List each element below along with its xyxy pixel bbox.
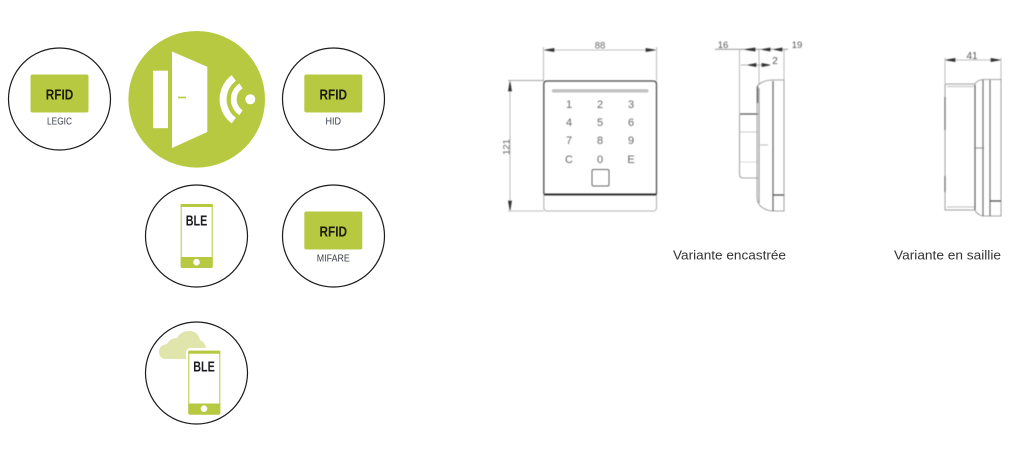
- icon: RFID HID badge: RFID: [320, 86, 347, 103]
- keypad: 6: [628, 117, 634, 129]
- technical drawing: flush-mounted side view: [715, 40, 802, 211]
- icon: BLE smartphone: [146, 185, 248, 287]
- keypad: 7: [566, 135, 572, 147]
- icon: RFID MIFARE badge: RFID: [320, 223, 347, 240]
- front housing: [757, 80, 784, 211]
- dimension: depth 41: [945, 51, 1001, 83]
- caption: surface-mounted variant: Variante en saillie: [894, 248, 1001, 262]
- keypad: E: [627, 154, 635, 166]
- icon: RFID HID badge: [282, 48, 384, 150]
- rear housing: [945, 84, 975, 210]
- keypad: C: [565, 154, 573, 166]
- keypad: 0: [597, 154, 603, 166]
- fingerprint sensor: [592, 170, 609, 186]
- icon: RFID MIFARE badge: [282, 185, 384, 287]
- technical drawing: surface-mounted side view: [945, 51, 1001, 216]
- dimension: width 88: 88: [595, 40, 605, 52]
- dimensions: 16, 19 and 2: 16: [718, 40, 728, 51]
- keypad: 8: [597, 135, 603, 147]
- reader body: [544, 81, 656, 211]
- rear housing: [740, 114, 758, 178]
- icon: RFID LEGIC badge: [8, 48, 110, 150]
- keypad: 9: [628, 135, 634, 147]
- dimension: width 88: [544, 40, 656, 81]
- dimensions: 16, 19 and 2: 19: [792, 40, 802, 51]
- dimensions: 16, 19 and 2: [715, 40, 802, 114]
- icon: RFID HID badge: HID: [326, 117, 341, 128]
- keypad: 4: [566, 117, 572, 129]
- keypad: 3: [628, 99, 634, 111]
- keypad: [565, 99, 635, 166]
- icon: RFID LEGIC badge: LEGIC: [47, 117, 72, 128]
- icon: door with wireless signal: [128, 31, 265, 168]
- icon: cloud BLE smartphone: [146, 322, 248, 424]
- keypad: 2: [597, 99, 603, 111]
- icon: RFID MIFARE badge: MIFARE: [317, 254, 350, 264]
- dimension: depth 41: 41: [966, 51, 978, 62]
- technical drawing: front view with keypad: [502, 40, 656, 211]
- keypad: 1: [566, 99, 572, 111]
- icon: RFID LEGIC badge: RFID: [46, 86, 73, 103]
- icon: cloud BLE smartphone: BLE: [193, 359, 215, 376]
- caption: flush-mounted variant: Variante encastrée: [673, 248, 786, 262]
- front housing: [975, 80, 1001, 216]
- keypad: 5: [597, 117, 603, 129]
- dimension: height 121: [502, 80, 544, 211]
- dimensions: 16, 19 and 2: 2: [772, 56, 778, 67]
- dimension: height 121: 121: [502, 139, 512, 155]
- icon: BLE smartphone: BLE: [186, 213, 207, 230]
